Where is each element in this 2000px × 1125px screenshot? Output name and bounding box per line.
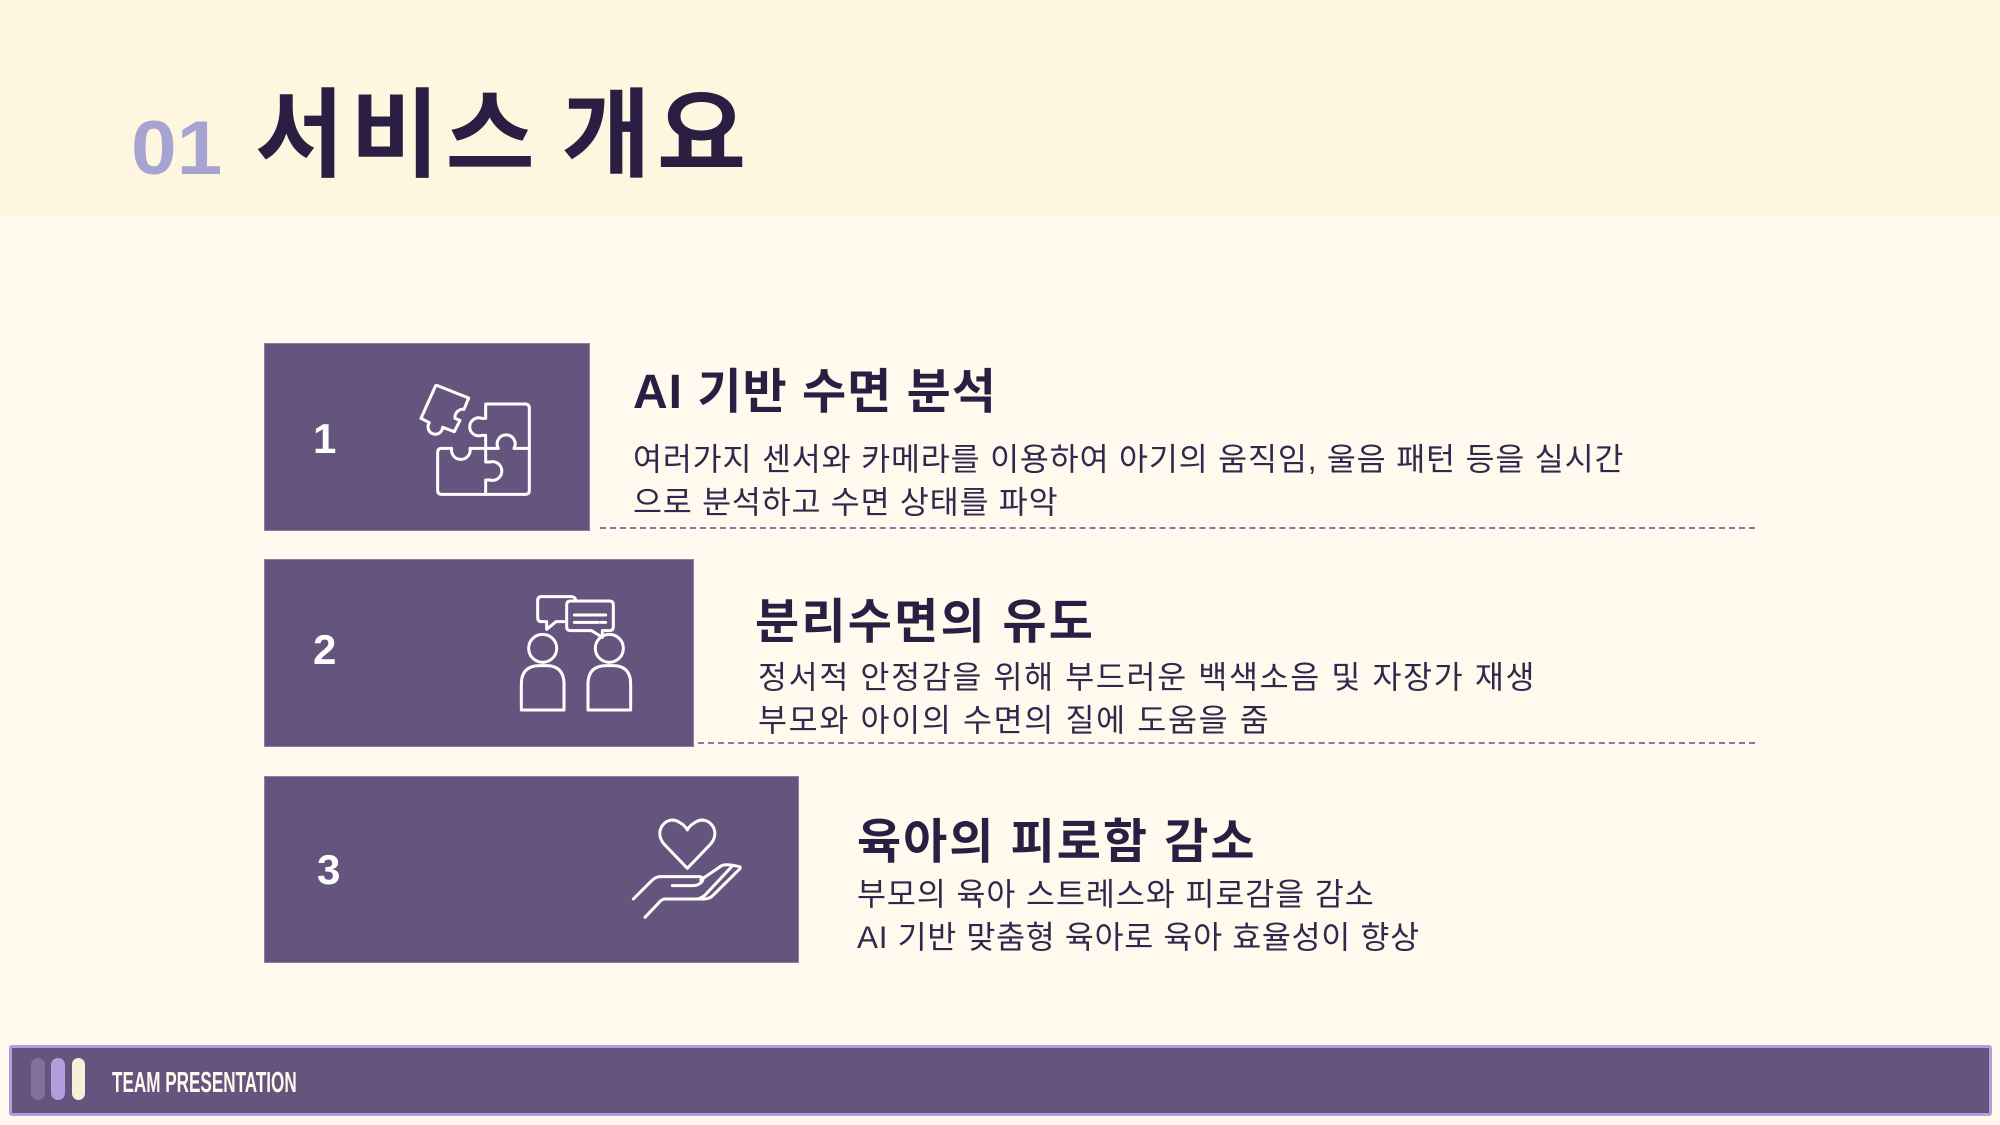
item 1 line 2: 으로 분석하고 수면 상태를 파악 — [633, 484, 1058, 520]
panel: item 2 — [264, 559, 1755, 747]
item 2 heading: 분리수면의 유도 — [755, 596, 1095, 649]
item 2 number: 2 — [313, 626, 336, 673]
footer label: TEAM PRESENTATION — [112, 1067, 297, 1099]
item 1 line 1: 여러가지 센서와 카메라를 이용하여 아기의 움직임, 울음 패턴 등을 실시간 — [633, 441, 1624, 477]
item 3 description — [857, 876, 1420, 955]
panel: item 1 — [264, 343, 1755, 531]
item 1 heading: AI 기반 수면 분석 — [633, 366, 997, 419]
item 2 line 2: 부모와 아이의 수면의 질에 도움을 줌 — [758, 702, 1270, 738]
item 1 number: 1 — [313, 415, 336, 462]
item 3 line 1: 부모의 육아 스트레스와 피로감을 감소 — [857, 876, 1375, 912]
item 3 line 2: AI 기반 맞춤형 육아로 육아 효율성이 향상 — [857, 919, 1420, 955]
footer pills — [31, 1058, 85, 1100]
header band — [0, 0, 2000, 217]
icon: people talking — [520, 595, 632, 712]
item 3 box — [264, 776, 799, 963]
item 2 line 1: 정서적 안정감을 위해 부드러운 백색소음 및 자장가 재생 — [758, 659, 1536, 695]
title: 서비스 개요 — [255, 81, 752, 190]
panel: item 3 — [264, 776, 1420, 963]
item 3 heading: 육아의 피로함 감소 — [857, 816, 1256, 869]
footer bar — [9, 1045, 1992, 1116]
item 3 number: 3 — [317, 846, 340, 893]
item 1 box — [264, 343, 590, 531]
section number: 01 — [131, 106, 222, 191]
item 2 box — [264, 559, 694, 747]
item 1 description — [633, 441, 1624, 520]
icon: heart in hand — [632, 818, 742, 919]
icon: puzzle — [420, 384, 531, 496]
item 2 description — [758, 659, 1536, 738]
